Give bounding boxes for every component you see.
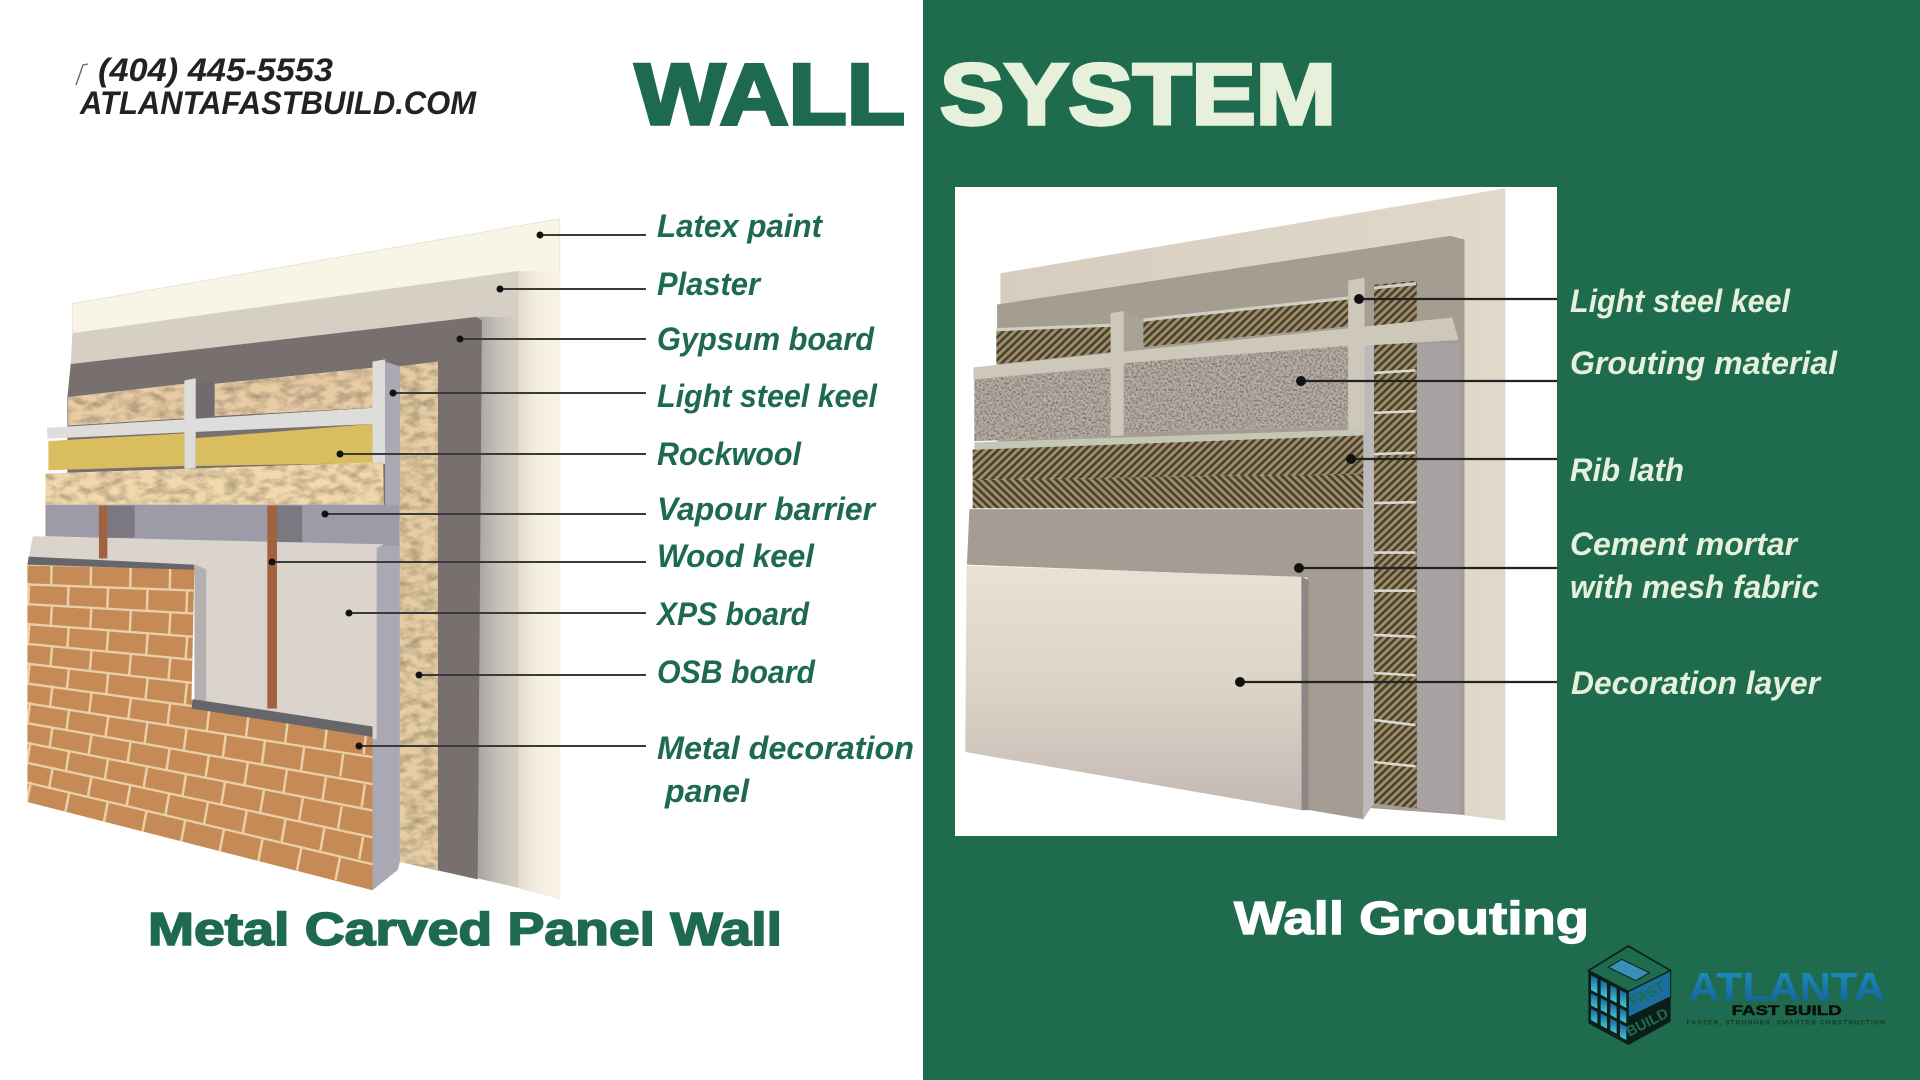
- layer: light steel keel: [47, 359, 385, 469]
- icon: building cube: BUILD: [1624, 1006, 1671, 1040]
- label: grouting material: Grouting material: [1570, 345, 1838, 381]
- label: vapour barrier: Vapour barrier: [657, 491, 877, 527]
- callout: light steel keel: [390, 390, 646, 396]
- logo divider: left: [1688, 1009, 1727, 1012]
- label: cement mortar: Cement mortar: [1570, 526, 1799, 562]
- label: with mesh fabric: with mesh fabric: [1570, 569, 1819, 605]
- callout: wood keel: [268, 558, 646, 566]
- phone number: (404) 445-5553: [98, 52, 333, 88]
- logo text: atlanta: ATLANTA: [1688, 966, 1885, 1010]
- layer: rib lath column: [1374, 281, 1417, 808]
- layer: metal decoration brick panel: [25, 558, 375, 897]
- layer: OSB horizontal: [45, 462, 384, 505]
- callout: latex paint: [536, 232, 646, 238]
- callout lines: left wall: [268, 232, 646, 750]
- callout: cement mortar: [1294, 563, 1557, 573]
- background: white left side: [0, 0, 923, 1080]
- contact details: [76, 52, 477, 121]
- layer: cement mortar: [967, 509, 1363, 819]
- callout: plaster: [496, 286, 646, 292]
- layer: wood keel: [99, 506, 277, 709]
- layer: keel shadow: [1124, 311, 1143, 352]
- layer: right side mortar: [1418, 343, 1460, 815]
- label: metal decoration: Metal decoration: [657, 730, 914, 766]
- label: XPS board: XPS board: [655, 596, 810, 632]
- layer: steel keel: [973, 278, 1458, 436]
- illustration: wall grouting section panel: [955, 187, 1557, 836]
- title: [635, 47, 1336, 143]
- subheading: wall grouting: Wall Grouting: [1234, 892, 1589, 944]
- callout: light steel keel: [1354, 294, 1557, 304]
- icon: building cube: FAST: [1627, 979, 1668, 1010]
- callout: rockwool: [336, 450, 646, 458]
- website: ATLANTAFASTBUILD.COM: [79, 85, 477, 121]
- callout: rib lath: [1346, 454, 1557, 464]
- layer: XPS side shadow: [194, 565, 206, 701]
- logo text: fast build: FAST BUILD: [1732, 1002, 1842, 1018]
- illustration: metal carved panel wall section: [25, 219, 560, 898]
- layer: gypsum board: [67, 317, 482, 879]
- layer: upper rib lath: [996, 299, 1348, 364]
- callout: XPS board: [346, 610, 646, 616]
- layer: back finish: [1000, 188, 1505, 821]
- label: panel: panel: [664, 773, 750, 809]
- layer: top mortar: [997, 236, 1465, 815]
- layer: rockwool: [48, 424, 372, 470]
- subheading: metal carved panel wall: Metal Carved Panel Wall: [148, 903, 782, 955]
- label: wood keel: Wood keel: [657, 538, 815, 574]
- callout: grouting material: [1296, 376, 1557, 386]
- label: OSB board: OSB board: [657, 654, 816, 690]
- layer: rib lath upper band: [973, 435, 1363, 480]
- label: decoration layer: Decoration layer: [1571, 665, 1822, 701]
- illustration: grouting layers: [965, 188, 1505, 821]
- layer: OSB strips between keels: [68, 368, 372, 425]
- title word: system: SYSTEM: [940, 47, 1336, 143]
- layer: panel flashing: [27, 557, 372, 737]
- label: latex paint: Latex paint: [657, 208, 823, 244]
- layer: OSB board column: [400, 362, 438, 870]
- layer: vapour barrier side: [372, 362, 400, 890]
- callout: OSB board: [416, 672, 646, 678]
- logo: atlanta fast build: [1588, 946, 1885, 1045]
- layer: XPS board: [29, 536, 384, 739]
- layer: grouting material: [974, 346, 1348, 441]
- layer: plaster: [71, 271, 519, 888]
- callout: decoration layer: [1235, 677, 1557, 687]
- panel: green right side: [923, 0, 1920, 1080]
- labels: right wall: [1570, 283, 1838, 701]
- label: rib lath: Rib lath: [1570, 452, 1684, 488]
- logo divider: right: [1847, 1009, 1885, 1012]
- layer: rib lath lip: [974, 429, 1363, 450]
- icon: phone mark: [76, 64, 88, 85]
- layer: latex paint: [72, 219, 560, 898]
- title word: wall: WALL: [635, 47, 905, 143]
- layer: decoration side: [1301, 577, 1309, 810]
- logo tagline: FASTER, STRONGER, SMARTER CONSTRUCTION: [1687, 1020, 1885, 1027]
- callout: gypsum board: [456, 336, 646, 342]
- layer: rib lath lower band: [973, 474, 1363, 508]
- panel: white image backdrop: [955, 187, 1557, 836]
- callout lines: right wall: [1235, 294, 1557, 687]
- layer: vapour barrier band: [45, 505, 399, 546]
- label: light steel keel: Light steel keel: [657, 378, 878, 414]
- layer: column edge: [1363, 343, 1374, 819]
- layer: decoration finish: [965, 566, 1301, 810]
- label: plaster: Plaster: [657, 266, 761, 302]
- layer: upper rib lath lip: [996, 284, 1416, 330]
- label: rockwool: Rockwool: [657, 436, 802, 472]
- icon: building cube: [1588, 946, 1671, 1045]
- callout: metal decoration panel: [356, 742, 646, 750]
- label: gypsum board: Gypsum board: [657, 321, 875, 357]
- layer: keel shadows: [107, 506, 302, 542]
- label: light steel keel: Light steel keel: [1570, 283, 1791, 319]
- callout: vapour barrier: [322, 510, 646, 518]
- labels: left wall: [655, 208, 914, 809]
